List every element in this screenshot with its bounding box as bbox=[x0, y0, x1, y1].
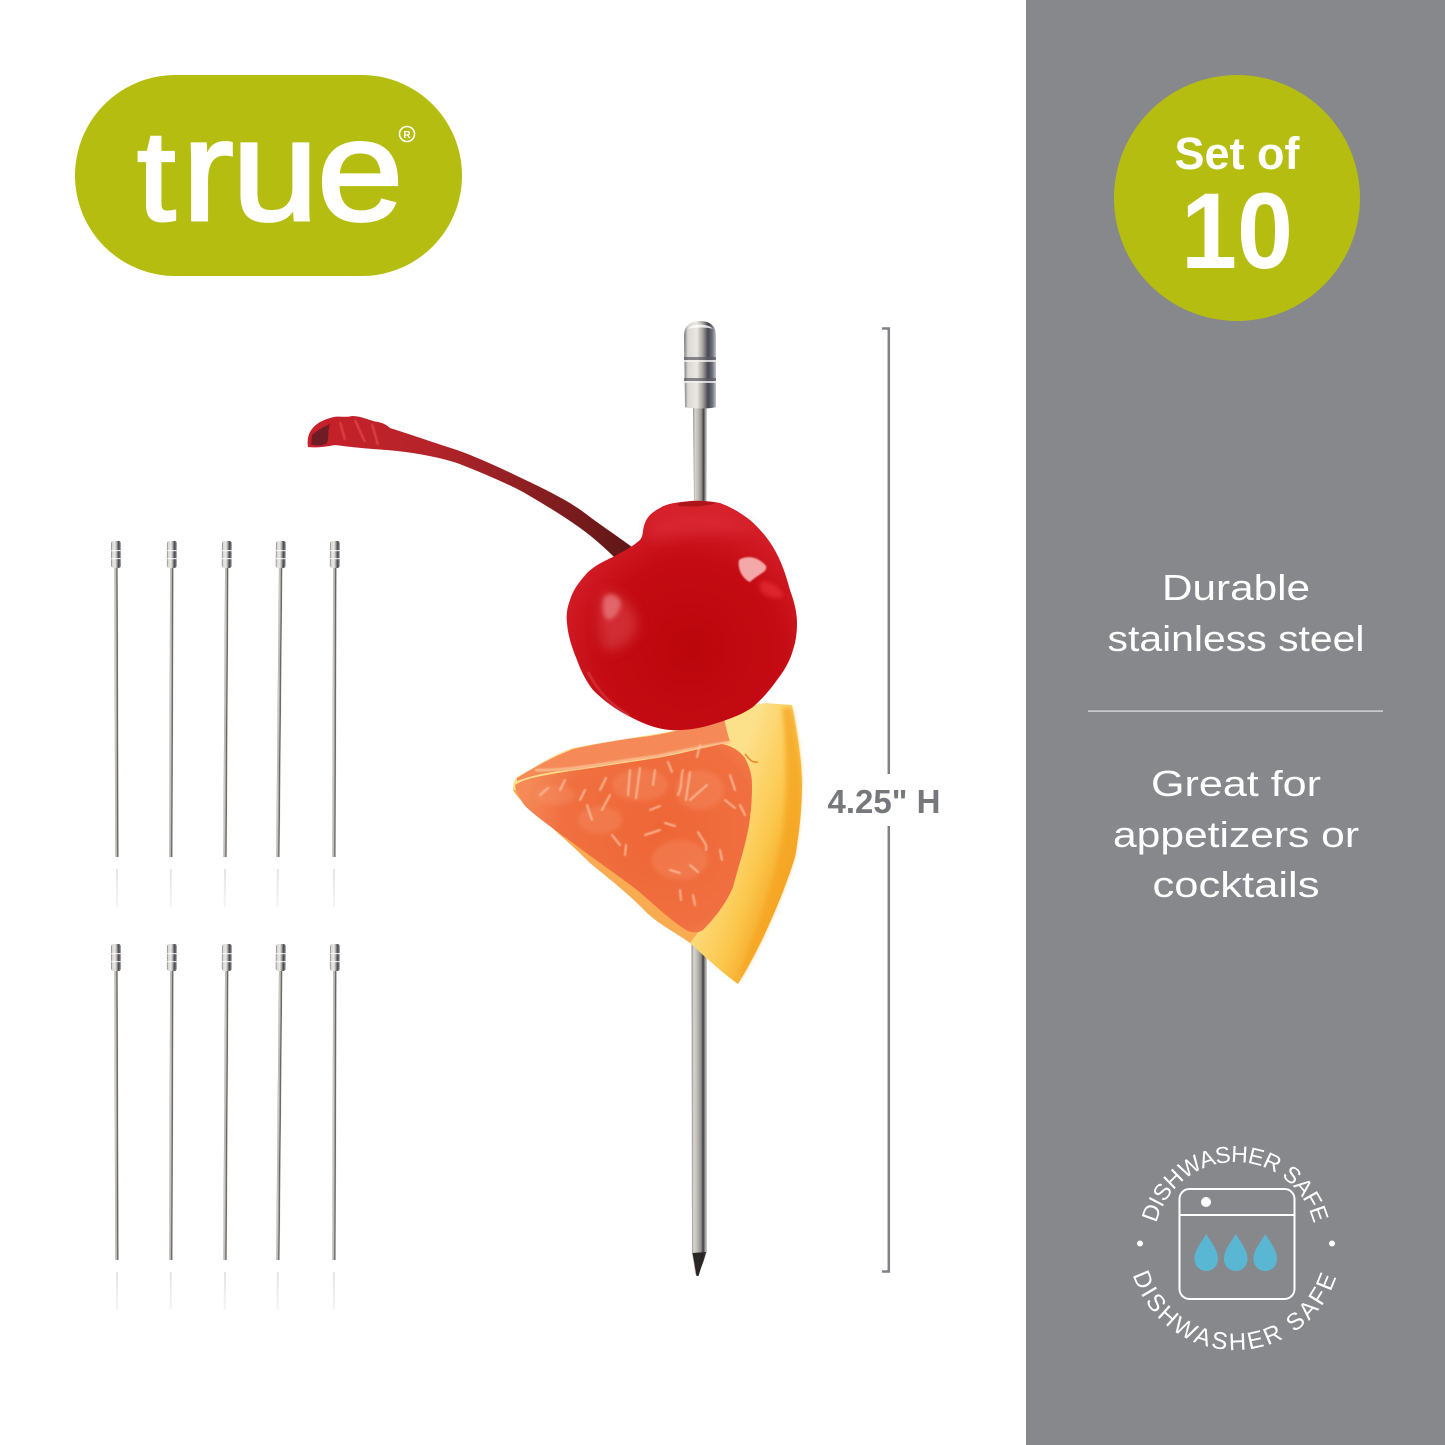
logo: true: r bbox=[182, 89, 234, 251]
outer rind mottling bbox=[738, 708, 801, 982]
icon: dishwasher safe stamp bbox=[1133, 1146, 1336, 1350]
bottom-left fold bbox=[588, 672, 630, 716]
dimension line bbox=[882, 328, 889, 1272]
badge: set of 10: 10 bbox=[1181, 170, 1293, 291]
feature text: great for appetizers or cocktails: Great for bbox=[1151, 763, 1321, 804]
right highlight bbox=[760, 582, 784, 598]
logo: true bbox=[75, 75, 462, 276]
cherry body bbox=[567, 501, 797, 730]
badge: set of 10: Set of bbox=[1174, 128, 1301, 179]
membrane strip bbox=[517, 718, 730, 781]
panel: grey sidebar bbox=[1026, 0, 1445, 1445]
pulp highlights bbox=[540, 745, 745, 905]
flesh bbox=[515, 744, 752, 932]
feature text: great for appetizers or cocktails: appetizers or bbox=[1113, 814, 1359, 855]
stem bbox=[308, 416, 632, 558]
logo: true: u bbox=[232, 89, 318, 251]
logo: true: R bbox=[403, 130, 411, 141]
dimension label: 4.25" H bbox=[828, 783, 940, 820]
icon: dishwasher safe stamp: DISHWASHER SAFE bbox=[1133, 1270, 1336, 1350]
logo: true: e bbox=[317, 89, 403, 251]
mini picks: bottom row bbox=[111, 944, 340, 1310]
logo: true: t bbox=[137, 105, 176, 248]
maraschino cherry bbox=[308, 416, 797, 730]
large pick bbox=[684, 321, 716, 1276]
mini picks: top row bbox=[111, 541, 340, 907]
icon: dishwasher safe stamp: DISHWASHER SAFE bbox=[1142, 1146, 1328, 1223]
feature text: durable stainless steel: stainless steel bbox=[1108, 618, 1364, 659]
feature text: durable stainless steel bbox=[1108, 567, 1364, 659]
pulp soft patches bbox=[535, 769, 724, 880]
feature text: great for appetizers or cocktails bbox=[1113, 763, 1359, 905]
lower-left edge band bbox=[513, 790, 700, 943]
badge: set of 10 bbox=[1114, 75, 1360, 321]
feature text: durable stainless steel: Durable bbox=[1162, 567, 1310, 608]
orange wedge bbox=[513, 703, 802, 984]
left soft highlight bbox=[599, 592, 637, 650]
top sheen bbox=[650, 514, 752, 540]
feature text: great for appetizers or cocktails: cocktails bbox=[1152, 864, 1320, 905]
